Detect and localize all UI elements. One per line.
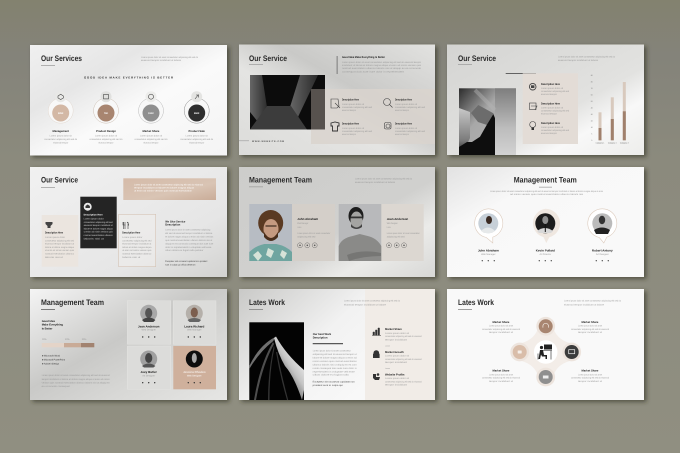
service: Product Design [90,91,123,144]
card: outlined description: consectetur adipiscing elit sed [122,239,152,242]
beige services panel [311,89,435,144]
service: Product Sale: consectetur adipiscing elit sed do [180,138,214,141]
bullet list [42,355,65,366]
text column [165,220,214,266]
text column: Lorem ipsum dolor sit amet consectetur adipiscing [165,228,211,232]
axis labels: 70 [591,87,593,90]
service: Product Design: 75K [104,112,108,115]
description item 3: consectetur adipiscing elit sed [342,130,373,133]
member: Kevin Pollard: Art Director [539,253,551,256]
team card: Jean Anderson: Jean Anderson [387,217,408,221]
stat: Website Profits: tempor incididunt [385,384,407,386]
card: Laura Richard: Web Manager [187,328,202,331]
subtitle [458,308,472,311]
hub backdrop [511,320,581,384]
label: top-left Market Share: Market Share [493,321,510,324]
card: Jessica Rhodes highlighted [173,346,216,389]
column: our best work: adipiscing elit sed do eiusmod tempor ut [313,353,357,356]
column: our best work [313,333,357,387]
team card: Jean Anderson: adipiscing elit sed [387,236,405,238]
social icons [298,243,317,248]
stat: Market Share [372,328,422,348]
intro text: Lorem ipsum dolor sit amet consectetur adipiscing elit sed do [355,178,413,180]
paragraph: ea commodo consequat [42,385,70,388]
label: bottom-right Market Share: consectetur adipiscing elit sed do eiusmod [571,377,610,380]
team card: Jean Anderson: Web Designer [387,222,398,225]
intro block: Good Idea Make Everything Is Better [342,56,385,59]
service: Market Share [134,91,168,144]
label: top-left Market Share: Lorem ipsum dolor sit amet [489,324,513,328]
team card: John Abraham: Lorem [297,226,301,229]
intro block: consequat duis aute irure dolor in reprehenderit [342,70,404,74]
card: outlined description: labore et dolore magna aliqua [122,246,152,249]
subtitle [249,63,263,66]
list item 3: consectetur adipiscing elit sed [541,129,570,132]
text column: Description [165,223,181,226]
stat: Website Profits: Lorem ipsum dolor sit [385,377,409,380]
service: Product Sale: eiusmod tempor [189,142,204,144]
column: our best work: reprehenderit in voluptate velit esse [313,370,356,374]
panel: slide 1 Our Services [30,45,227,156]
stat: Website Profits [373,373,422,386]
heading: Lates Work: Lates Work [458,298,494,307]
axis labels: 10 [591,126,593,129]
label: bottom-left Market Share [482,370,521,383]
text column: dolor in reprehenderit in voluptate velit esse [165,246,212,249]
card: beige description: labore et dolore magna aliqua [45,246,75,249]
card: beige description: eiusmod tempor incididunt ut [45,243,74,246]
service: Product Sale: Lorem ipsum dolor sit [186,134,208,138]
list item 1: consectetur adipiscing elit sed [541,90,570,93]
heading: Our Service: Our Service [41,176,78,185]
card: beige description: ut enim ad minim veniam quis [45,249,75,252]
card: beige description: Lorem ipsum dolor [45,236,65,239]
service: Management: consectetur adipiscing elit sed do [44,138,78,141]
text column: elit sed do eiusmod tempor incididunt ut labore [165,232,213,235]
intro text: eiusmod tempor incididunt ut labore [141,59,182,62]
card: black description: ut enim ad minim veniam quis [84,231,114,234]
node halos [510,317,581,386]
intro text [344,300,401,306]
list item 1 [529,83,570,96]
member: Kevin Pollard [533,209,560,261]
label: bottom-right Market Share: Lorem ipsum dolor sit amet [578,373,602,376]
description item 4: Description Here [395,122,412,126]
intro text: Lorem ipsum dolor sit amet consectetur adipiscing elit sed do [564,300,622,302]
intro text: eiusmod tempor incididunt ut labore [558,59,599,62]
service: Management: $25K [58,112,64,115]
paragraph: veniam quis nostrud exercitation ullamco laboris nisi ut aliquip ex [42,382,111,384]
portrait: curly-haired man [249,204,292,261]
card: beige description: laboris nisi ut [45,256,63,259]
intro text: eiusmod tempor incididunt ut labore [355,181,396,184]
text column: et dolore magna aliqua ut enim ad minim veniam [165,236,213,238]
bold tagline: Good Idea [42,320,55,323]
label: top-right Market Share: Lorem ipsum dolor sit amet [578,324,602,328]
bullet list: Adobe InDesign [44,363,60,366]
description item 4: consectetur adipiscing elit sed [395,130,426,133]
service: Product Sale: Product Sale [188,130,205,133]
team card: Jean Anderson: Lorem [387,226,391,229]
diagram: four-node hub [510,317,581,386]
panel: slide 6 Management Team pins [447,167,644,277]
underline [41,308,55,311]
progress bar: 30% [82,338,86,341]
label: bottom-right Market Share: tempor incididunt ut [578,380,602,383]
stat: Market Growth [373,350,422,370]
node: right monitor [565,345,579,359]
photo: skyscraper [249,322,304,400]
website link: WWW.WEBSITE.COM [252,140,284,143]
list item 1: eiusmod tempor [541,93,557,96]
service: Product Design: Lorem ipsum dolor sit [95,134,117,138]
photo: dark corridor [250,75,325,130]
panel: slide 8 Lates Work [239,289,435,400]
text column: cillum dolore eu fugiat nulla pariatur [165,249,204,252]
label: bottom-left Market Share: Lorem ipsum dolor sit amet [489,373,513,376]
panel: slide 3 Our Service with chart [447,44,644,155]
list item 3: eiusmod tempor [541,132,557,135]
bar: Category 3: Category 3 [620,142,629,144]
team card: John Abraham: adipiscing elit sed [297,236,316,238]
stat: Market Growth: consectetur adipiscing elit sed do eiusmod [385,358,422,361]
description item 2 [384,98,426,112]
column: our best work: Lorem ipsum dolor sit amet consectetur [313,350,351,352]
tan callout banner [123,178,216,200]
service: Market Share: Market Share [143,130,160,133]
right beige panel [365,289,435,400]
card: black description: nostrud exercitation ullamco [84,234,113,237]
card: outlined description: ut enim ad minim veniam quis [122,249,152,252]
card: black description: Lorem ipsum dolor [84,218,104,220]
column: our best work: Our best Work [313,333,332,336]
intro block: nostrud exercitation ullamco laboris nisi ut aliquip ex ea commodo [342,67,422,70]
intro text: eiusmod tempor incididunt ut labore [344,304,387,306]
description item 1 [331,98,373,112]
panel: slide 7 Management Team grid [30,289,227,400]
service: Market Share: consectetur adipiscing elit sed do [134,138,168,141]
column: our best work: ullamco laboris nisi ut aliquip ex ea com [313,364,357,366]
bullet list: Microsoft PowerPoint [44,359,65,362]
list item 1: Lorem ipsum dolor sit [541,87,563,90]
website link [239,140,284,143]
text column: quis nostrud exercitation ullamco laboris nisi ut [165,239,213,242]
card: black description: consectetur adipiscing elit sed [84,221,113,224]
card: outlined description: nostrud exercitation ullamco [122,252,152,256]
list item 2: eiusmod tempor [541,112,557,116]
axis labels: 90 [591,74,593,77]
description item 1: eiusmod tempor [342,109,356,112]
card: Jean Anderson: Web Designer [141,328,156,331]
card: Jessica Rhodes highlighted: Jessica Rhodes [183,370,206,374]
list item 3: Description Here [541,122,560,125]
text column: We Give Service [165,220,186,223]
team card: Jean Anderson: Lorem ipsum dolor sit amet consectetur [387,232,420,235]
card: outlined description: Lorem ipsum dolor [122,236,143,239]
card: black description [80,197,117,248]
heading: Management Team: Management Team [249,176,312,185]
list item 2 [530,102,570,116]
description item 3: eiusmod tempor [342,133,356,136]
intro block: incididunt ut labore et dolore magna aliqua ut enim ad minim veniam quis [342,64,422,67]
service: Product Sale [180,91,214,144]
team card: John Abraham: Web Manager [297,222,308,225]
stat: Website Profits: Website Profits [385,373,405,376]
description item 4: eiusmod tempor [395,133,409,136]
list item 3 [530,122,570,135]
column: our best work: Excepteur sint occaecat cupidatat non [313,380,355,384]
intro text: ad minim veniam quis nostrud exercitation ullamco laboris nisi [510,193,584,196]
label: bottom-right Market Share [571,370,610,383]
progress bar [42,338,94,347]
label: bottom-left Market Share: consectetur adipiscing elit sed do eiusmod [482,377,521,380]
column: our best work: Description [313,337,328,340]
column: our best work: cillum dolore eu fugiat nulla [313,374,350,376]
node: bottom device [539,370,553,384]
bar: Category 2: Category 2 [608,142,617,144]
label: top-right Market Share: consectetur adipiscing elit sed do eiusmod [571,328,610,331]
description item 3 [331,122,373,136]
label: top-right Market Share [571,321,610,334]
heading: Our Services: Our Services [41,54,82,63]
service: Product Design: Product Design [96,130,116,133]
intro block [337,56,422,74]
underline [539,186,552,188]
label: top-left Market Share [482,321,521,334]
stat: Market Share: Lorem [385,344,391,348]
description item 2: eiusmod tempor [395,109,409,112]
member: Robert Antony [588,209,617,261]
subtitle underline [41,64,55,67]
member: John Abraham: Web Manager [481,253,496,256]
panel: slide 5 Management Team photos [239,167,435,277]
social icons [386,243,406,248]
panel: slide 9 Lates Work diagram [447,289,644,400]
label: top-right Market Share: tempor incididunt ut [578,331,602,334]
column: our best work: labore et dolore magna aliqua ut enim ad [313,356,357,360]
portrait: man with glasses [339,204,381,261]
intro text [490,190,603,196]
team card: John Abraham: Lorem ipsum dolor sit amet consectetur [297,232,330,235]
tan callout banner: Lorem ipsum dolor sit amet consectetur adipiscing elit sed do eiusmod [134,184,204,186]
card: Jean Anderson [127,301,171,344]
axis labels: 30 [591,113,593,116]
card: beige description: nostrud exercitation ullamco [45,252,75,256]
description item 2: Lorem ipsum dolor sit [395,103,417,106]
heading: Management Team: Management Team [514,176,577,185]
text column: sunt in culpa qui officia deserunt [165,264,196,266]
card: beige description: consectetur adipiscing elit sed [45,239,75,242]
heading: Lates Work: Lates Work [249,298,285,307]
description item 3: Lorem ipsum dolor sit [342,127,364,130]
photo: abstract architecture [459,88,516,155]
heading: Our Service: Our Service [458,54,496,63]
member: John Abraham: John Abraham [478,248,499,252]
axis labels: 50 [591,100,593,103]
intro text [141,56,199,62]
member: John Abraham [475,209,503,261]
service: Product Design: eiusmod tempor [98,142,114,144]
label: bottom-left Market Share: tempor incididunt ut [489,380,513,383]
intro text: Lorem ipsum dolor sit amet consectetur adipiscing elit sed do [141,56,199,59]
heading: Our Service: Our Service [249,54,287,63]
column: our best work: proident sunt in culpa qui [313,384,343,387]
description item 4 [384,122,426,136]
axis labels: 60 [591,94,593,96]
service: Product Sale: $50K [194,112,200,115]
paragraph: Lorem ipsum dolor sit amet consectetur adipiscing elit sed do eiusmod [42,374,110,377]
card: Jessica Rhodes highlighted: Web Designer [187,374,202,377]
intro text [564,300,622,306]
axis labels: 0 [591,139,592,142]
team card: Jean Anderson [339,204,424,261]
service: Product Design: consectetur adipiscing elit sed do [90,138,123,141]
card: black description: eiusmod tempor incididunt ut [84,224,113,227]
service: Management: eiusmod tempor [53,142,68,144]
bullet list: Microsoft Word [44,355,61,358]
paragraph: tempor incididunt ut labore et dolore magna aliqua ut enim ad minim [42,378,110,381]
label: top-left Market Share: consectetur adipiscing elit sed do eiusmod [482,328,521,331]
paragraph [42,374,111,388]
card: Laura Richard: Laura Richard [184,324,205,328]
text column: aliquip ex ea commodo consequat duis aute irure [165,242,214,246]
accent rule [506,72,536,75]
intro text: Lorem ipsum dolor sit amet consectetur adipiscing elit sed do [344,300,401,302]
beige list panel [523,73,578,144]
stat: Market Share: Lorem ipsum dolor sit [385,332,409,335]
heading: Management Team: Management Team [41,298,104,307]
label: bottom-right Market Share: Market Share [582,370,599,372]
node: top headphones [539,319,553,333]
node: left chat [513,345,527,359]
column: our best work: modo consequat duis aute irure dolor in [313,367,357,370]
card: black description: laboris nisi ut [84,237,104,240]
service: Management [44,91,78,144]
panel: slide 4 Our Service cards [30,167,227,277]
label: bottom-left Market Share: Market Share [493,370,510,372]
bar chart [591,74,629,144]
description item 4: Lorem ipsum dolor sit [395,127,417,130]
service: Management: Management [52,130,69,133]
progress bar: 40% [65,338,70,341]
axis labels: 40 [591,106,593,110]
card: Laura Richard [173,301,216,344]
service: Management: Lorem ipsum dolor sit [50,134,72,138]
bar: Category 1: Category 1 [596,142,604,144]
card: Joey Butler: Art Designer [142,374,155,377]
column: our best work: minim veniam quis nostrud exercitation [313,360,357,363]
card: Joey Butler: Joey Butler [141,370,158,374]
list item 1: Description Here [541,83,560,86]
tagline: GOOD IDEA MAKE EVERYTHING IS BETTER [84,76,173,80]
list item 3: Lorem ipsum dolor sit [541,126,563,129]
stat: Market Growth: Market Growth [385,351,404,354]
service: Market Share: Lorem ipsum dolor sit [140,134,162,138]
progress bar: 30% [42,338,47,341]
label: top-left Market Share: tempor incididunt ut [489,331,513,334]
list item 2: Lorem ipsum dolor sit [541,106,563,109]
card: outlined description: laboris nisi ut [122,256,141,259]
stat: Market Growth: Lorem ipsum dolor sit [385,354,409,358]
subtitle underline [41,186,55,189]
stat: Market Share: Market Share [385,328,402,331]
service: Market Share: eiusmod tempor [144,142,159,144]
stat: Website Profits: consectetur adipiscing elit sed do eiusmod [385,380,422,383]
intro block: Lorem ipsum dolor sit amet consectetur adipiscing elit sed do eiusmod tempor [342,61,421,64]
card: Joey Butler [127,346,171,389]
centre circle with worker icon [534,340,558,364]
card: beige description [42,215,78,267]
member: Robert Antony: Robert Antony [592,248,613,252]
axis labels: 20 [591,120,593,122]
card: outlined description [119,214,156,267]
member: Kevin Pollard: Kevin Pollard [536,248,555,252]
card: Jean Anderson: Jean Anderson [138,324,160,328]
list item 2: Description Here [541,102,560,106]
axis labels: 5 [591,132,592,136]
card: beige description: Description Here [45,232,63,234]
subtitle [249,308,263,311]
tan callout banner: tempor incididunt ut labore et dolore magna aliqua [134,187,195,190]
description item 1: Lorem ipsum dolor sit [342,103,364,106]
intro text: eiusmod tempor incididunt ut labore [564,304,605,306]
team card: John Abraham [249,204,335,261]
axis labels [591,74,593,142]
description item 2: consectetur adipiscing elit sed [395,106,426,109]
tan callout banner: ut enim ad minim veniam quis nostrud exercitation [134,190,193,193]
team card: John Abraham: John Abraham [297,217,319,221]
list item 2: consectetur adipiscing elit sed [541,110,570,112]
subtitle [249,186,263,188]
card: outlined description: eiusmod tempor incididunt ut [122,243,152,246]
intro text [558,56,616,62]
description item 2: Description Here [395,98,412,102]
panel: slide 2 Our Service [239,44,435,155]
subtitle [458,63,472,66]
member: Robert Antony: Art Designer [596,253,609,256]
text column: Excepteur sint occaecat cupidatat non proident [165,260,208,263]
intro text [355,178,413,184]
axis labels: 80 [591,80,593,84]
description item 3: Description Here [342,122,359,126]
description item 1: Description Here [342,98,359,102]
bold tagline: Is Better [42,327,52,330]
card: outlined description: Description Here [122,232,141,234]
card: black description: Description Here [84,213,103,216]
stat: Market Share: consectetur adipiscing elit sed do eiusmod [385,335,422,338]
intro text: Lorem ipsum dolor sit amet consectetur adipiscing elit sed do eiusmod tempor incididunt ut labore et dolore magna aliqua ut enim [490,190,603,193]
bold tagline: Make Everything [42,324,63,326]
service: Market Share: $10K [148,112,154,115]
bold tagline [42,320,63,330]
card: black description: labore et dolore magna aliqua [84,227,113,230]
stat: Market Share: tempor incididunt [385,338,407,341]
stat: Market Growth: Lorem [385,367,391,370]
description item 1: consectetur adipiscing elit sed [342,106,373,109]
stat: Market Growth: tempor incididunt [385,361,407,364]
intro text: Lorem ipsum dolor sit amet consectetur adipiscing elit sed do [558,56,616,58]
label: top-right Market Share: Market Share [582,321,599,324]
